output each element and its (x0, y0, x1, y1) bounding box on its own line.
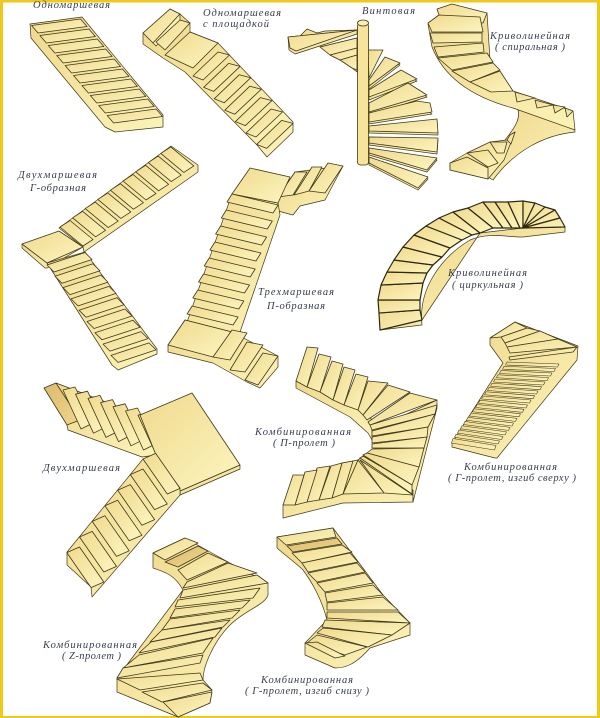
staircase: curved arc (378, 201, 565, 330)
caption: bend at bottom line two: ( Г-пролет, изгиб снизу ) (245, 686, 370, 697)
caption: single flight: Одномаршевая (33, 0, 110, 11)
caption: Z-turn line one: Комбинированная (42, 640, 137, 651)
caption: bend at top line one: Комбинированная (463, 462, 557, 473)
caption: arc line two: ( циркульная ) (452, 280, 524, 291)
caption: U-shaped line two: П-образная (266, 301, 325, 312)
staircase: two flight with large landing (44, 383, 240, 597)
caption: single flight with landing: Одномаршевая (203, 8, 281, 19)
staircase: single flight with landing (143, 9, 293, 157)
staircase: combined Z-turn (117, 538, 268, 717)
staircase: three flight U-shaped (168, 163, 343, 388)
caption line two: with landing: с площадкой (203, 19, 270, 30)
caption: spiral: Винтовая (362, 6, 415, 17)
caption: Z-turn line two: ( Z-пролет ) (62, 651, 122, 662)
caption: bend at top line two: ( Г-пролет, изгиб сверху ) (448, 473, 576, 484)
caption: arc line one: Криволинейная (447, 268, 527, 279)
caption: curved spiral line two: ( спиральная ) (495, 42, 566, 53)
staircase: single flight (30, 17, 163, 132)
staircase: curved spiral (428, 4, 575, 180)
staircase: combined, bend at top (452, 322, 578, 458)
caption: two flight: Двухмаршевая (42, 463, 120, 474)
staircase: combined U-turn (283, 347, 437, 518)
caption: combined U-turn line one: Комбинированная (254, 427, 351, 438)
staircase: spiral around pole (288, 20, 438, 190)
staircase: two flight L-shaped (22, 146, 198, 370)
caption: L-shaped line two: Г-образная (29, 183, 86, 194)
caption: U-shaped line one: Трехмаршевая (258, 287, 334, 298)
staircase: combined, bend at bottom (277, 528, 410, 668)
caption: L-shaped line one: Двухмаршевая (17, 170, 97, 181)
caption: bend at bottom line one: Комбинированная (260, 675, 353, 686)
icon: central pole (358, 20, 368, 165)
caption: combined U-turn line two: ( П-пролет ) (273, 438, 336, 449)
caption: curved spiral line one: Криволинейная (489, 31, 570, 42)
